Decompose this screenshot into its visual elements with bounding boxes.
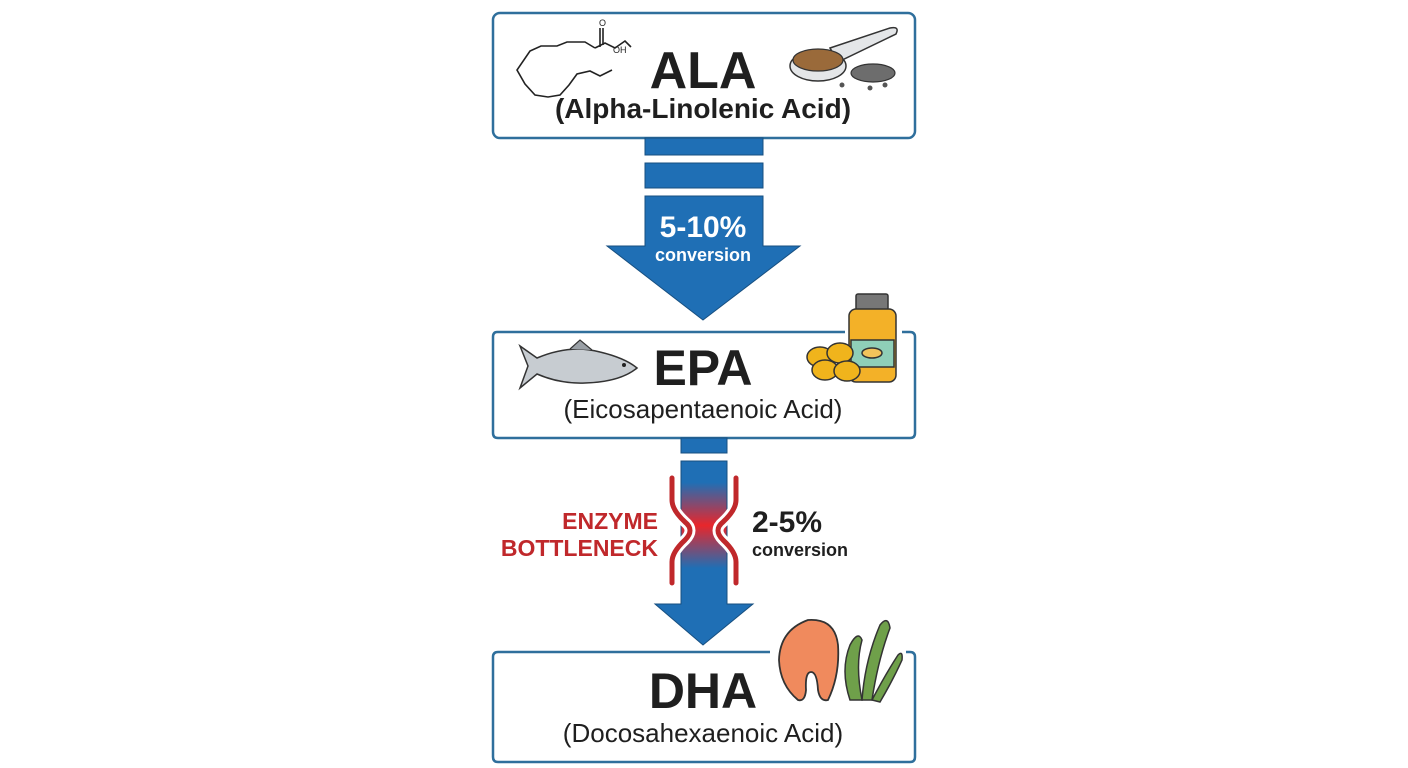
icon: bottleneck brackets bbox=[672, 478, 736, 583]
label: enzyme bottleneck bbox=[501, 508, 658, 561]
title: DHA: DHA bbox=[649, 663, 757, 719]
icon: spoon with seeds bbox=[790, 28, 897, 91]
label: 2-5% conversion bbox=[752, 506, 848, 560]
label: enzyme bottleneck: ENZYME bbox=[562, 508, 658, 534]
label: enzyme bottleneck: BOTTLENECK bbox=[501, 535, 658, 561]
panel: EPA bbox=[493, 294, 915, 438]
title: EPA: EPA bbox=[653, 340, 753, 396]
icon: ALA molecule: O bbox=[599, 18, 606, 28]
subtitle: DHA: (Docosahexaenoic Acid) bbox=[563, 718, 843, 748]
label: 2-5% conversion: 2-5% bbox=[752, 506, 822, 539]
subtitle: ALA: (Alpha-Linolenic Acid) bbox=[555, 93, 851, 124]
icon: salmon steak bbox=[779, 620, 838, 700]
label: 2-5% conversion: conversion bbox=[752, 540, 848, 560]
arrow: EPA to DHA with bottleneck bbox=[655, 438, 753, 645]
icon: supplements bottle bbox=[807, 294, 896, 382]
icon: ALA molecule bbox=[517, 18, 631, 97]
panel: DHA bbox=[493, 620, 915, 762]
icon: ALA molecule: OH bbox=[613, 45, 626, 55]
label: 5-10% conversion: 5-10% bbox=[660, 211, 746, 244]
panel: ALA bbox=[493, 13, 915, 138]
arrow: ALA to EPA bbox=[607, 138, 800, 320]
title: ALA: ALA bbox=[650, 42, 756, 100]
label: 5-10% conversion: conversion bbox=[655, 245, 751, 265]
icon: fish bbox=[520, 340, 637, 388]
icon: seaweed bbox=[845, 621, 902, 702]
subtitle: EPA: (Eicosapentaenoic Acid) bbox=[564, 394, 842, 424]
label: 5-10% conversion bbox=[655, 211, 751, 265]
